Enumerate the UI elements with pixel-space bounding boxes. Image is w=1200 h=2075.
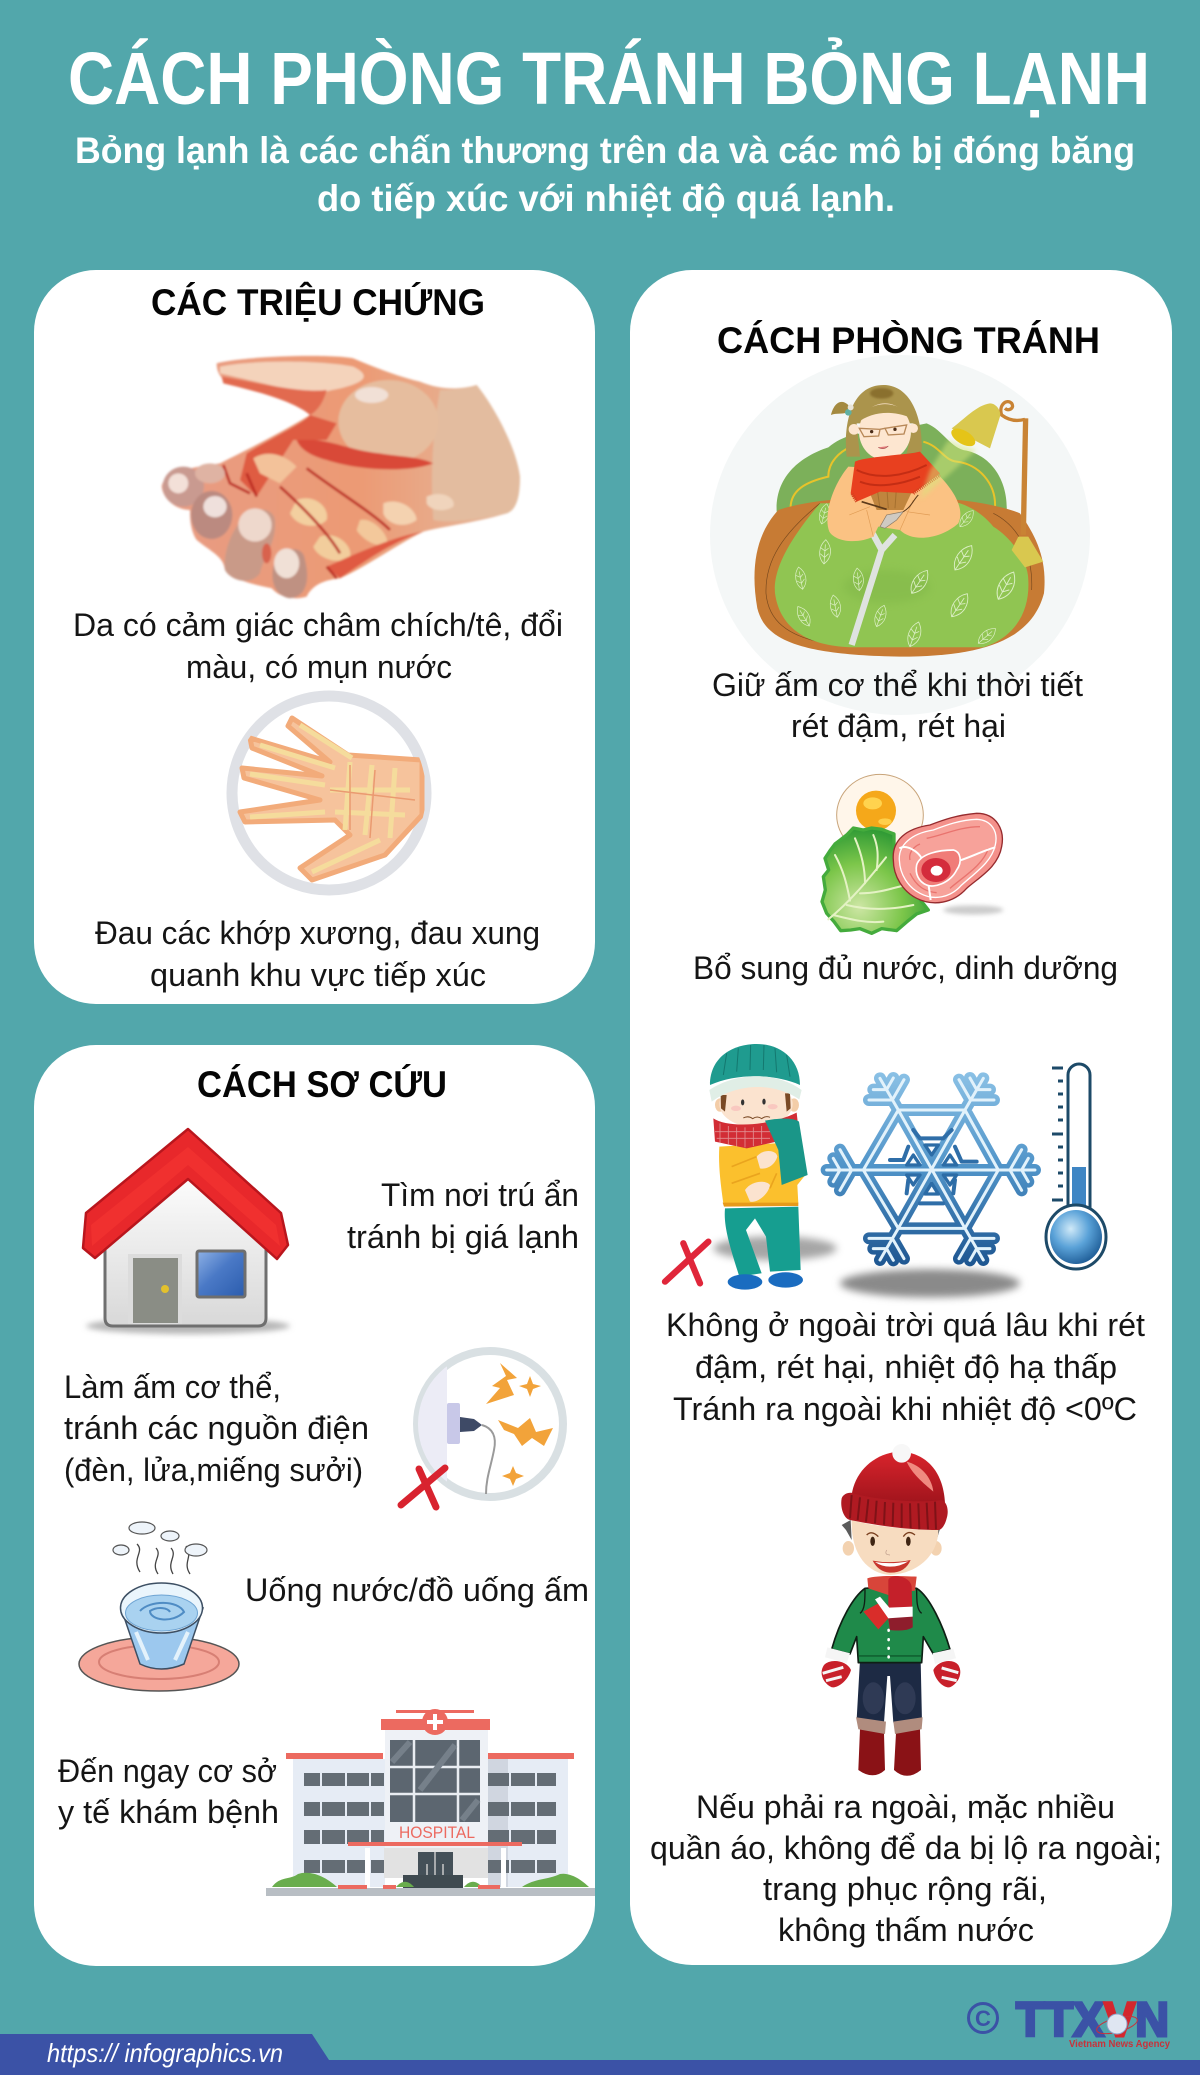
logo: TTXVN: TTXVN bbox=[1016, 1994, 1169, 2047]
symptom text 1: màu, có mụn nước bbox=[186, 649, 452, 685]
prevention text 1: Giữ ấm cơ thể khi thời tiết bbox=[712, 667, 1083, 703]
illustration: thermometer bbox=[1046, 1064, 1106, 1269]
prevention text 4: trang phục rộng rãi, bbox=[763, 1871, 1047, 1907]
panel: symptoms bbox=[34, 270, 595, 1004]
prevention text 3: Không ở ngoài trời quá lâu khi rét bbox=[666, 1307, 1145, 1343]
symptom text 2 bbox=[95, 915, 540, 993]
illustration: cold child bbox=[665, 1044, 837, 1290]
footer url: https:// infographics.vn bbox=[47, 2038, 283, 2068]
subtitle: do tiếp xúc với nhiệt độ quá lạnh. bbox=[317, 178, 895, 219]
heading: prevention: CÁCH PHÒNG TRÁNH bbox=[717, 319, 1100, 361]
illustration: girl wrapped in blanket with lamp bbox=[754, 385, 1045, 657]
prevention text 3 bbox=[666, 1307, 1145, 1427]
heading: symptoms: CÁC TRIỆU CHỨNG bbox=[151, 281, 485, 323]
illustration: hospital bbox=[266, 1709, 595, 1896]
prevention text 4 bbox=[650, 1789, 1162, 1948]
subtitle: Bỏng lạnh là các chấn thương trên da và các mô bị đóng băng bbox=[75, 130, 1135, 171]
first aid text 2: (đèn, lửa,miếng sưởi) bbox=[64, 1452, 363, 1488]
illustration: aching hand in circle bbox=[232, 696, 426, 890]
icon: glass of warm water on saucer bbox=[79, 1522, 239, 1691]
prevention text 1: rét đậm, rét hại bbox=[791, 708, 1006, 744]
illustration: hospital: HOSPITAL bbox=[399, 1823, 475, 1842]
panel: first aid bbox=[34, 1045, 595, 1966]
panel: prevention bbox=[630, 270, 1172, 1965]
first aid text 1 bbox=[347, 1177, 579, 1255]
prevention text 1 bbox=[712, 667, 1083, 744]
prevention text 4: không thấm nước bbox=[778, 1912, 1034, 1948]
symptom text 2: quanh khu vực tiếp xúc bbox=[150, 957, 486, 993]
prevention text 4: quần áo, không để da bị lộ ra ngoài; bbox=[650, 1830, 1162, 1866]
illustration pale circle bbox=[710, 355, 1090, 715]
first aid text 2: tránh các nguồn điện bbox=[64, 1410, 369, 1446]
footer bar bbox=[0, 2034, 1200, 2075]
illustration: snowflake bbox=[827, 1078, 1035, 1297]
first aid text 1: tránh bị giá lạnh bbox=[347, 1219, 579, 1255]
icon: house bbox=[83, 1129, 290, 1334]
illustration: frostbitten hand bbox=[162, 356, 520, 598]
logo: TTXVN: C bbox=[975, 2006, 991, 2031]
heading: first aid: CÁCH SƠ CỨU bbox=[197, 1063, 447, 1105]
symptom text 1: Da có cảm giác châm chích/tê, đổi bbox=[73, 607, 563, 643]
first aid text 2 bbox=[64, 1369, 369, 1488]
symptom text 1 bbox=[73, 607, 563, 685]
logo: TTXVN: Vietnam News Agency bbox=[1069, 2039, 1170, 2050]
illustration: warmly dressed boy bbox=[822, 1444, 960, 1776]
first aid text 4: y tế khám bệnh bbox=[58, 1794, 279, 1830]
first aid text 3: Uống nước/đồ uống ấm bbox=[245, 1572, 589, 1608]
first aid text 4: Đến ngay cơ sở bbox=[58, 1753, 277, 1789]
prevention text 3: Tránh ra ngoài khi nhiệt độ <0ºC bbox=[673, 1391, 1137, 1427]
prevention text 4: Nếu phải ra ngoài, mặc nhiều bbox=[696, 1789, 1115, 1825]
illustration: egg, lettuce and meat bbox=[822, 774, 1003, 933]
first aid text 2: Làm ấm cơ thể, bbox=[64, 1369, 281, 1405]
prevention text 3: đậm, rét hại, nhiệt độ hạ thấp bbox=[695, 1349, 1117, 1385]
first aid text 4 bbox=[58, 1753, 279, 1830]
symptom text 2: Đau các khớp xương, đau xung bbox=[95, 915, 540, 951]
subtitle bbox=[75, 130, 1135, 219]
first aid text 1: Tìm nơi trú ẩn bbox=[381, 1177, 579, 1213]
prevention text 2: Bổ sung đủ nước, dinh dưỡng bbox=[693, 950, 1118, 986]
icon: electric plug with cross bbox=[401, 1345, 563, 1507]
